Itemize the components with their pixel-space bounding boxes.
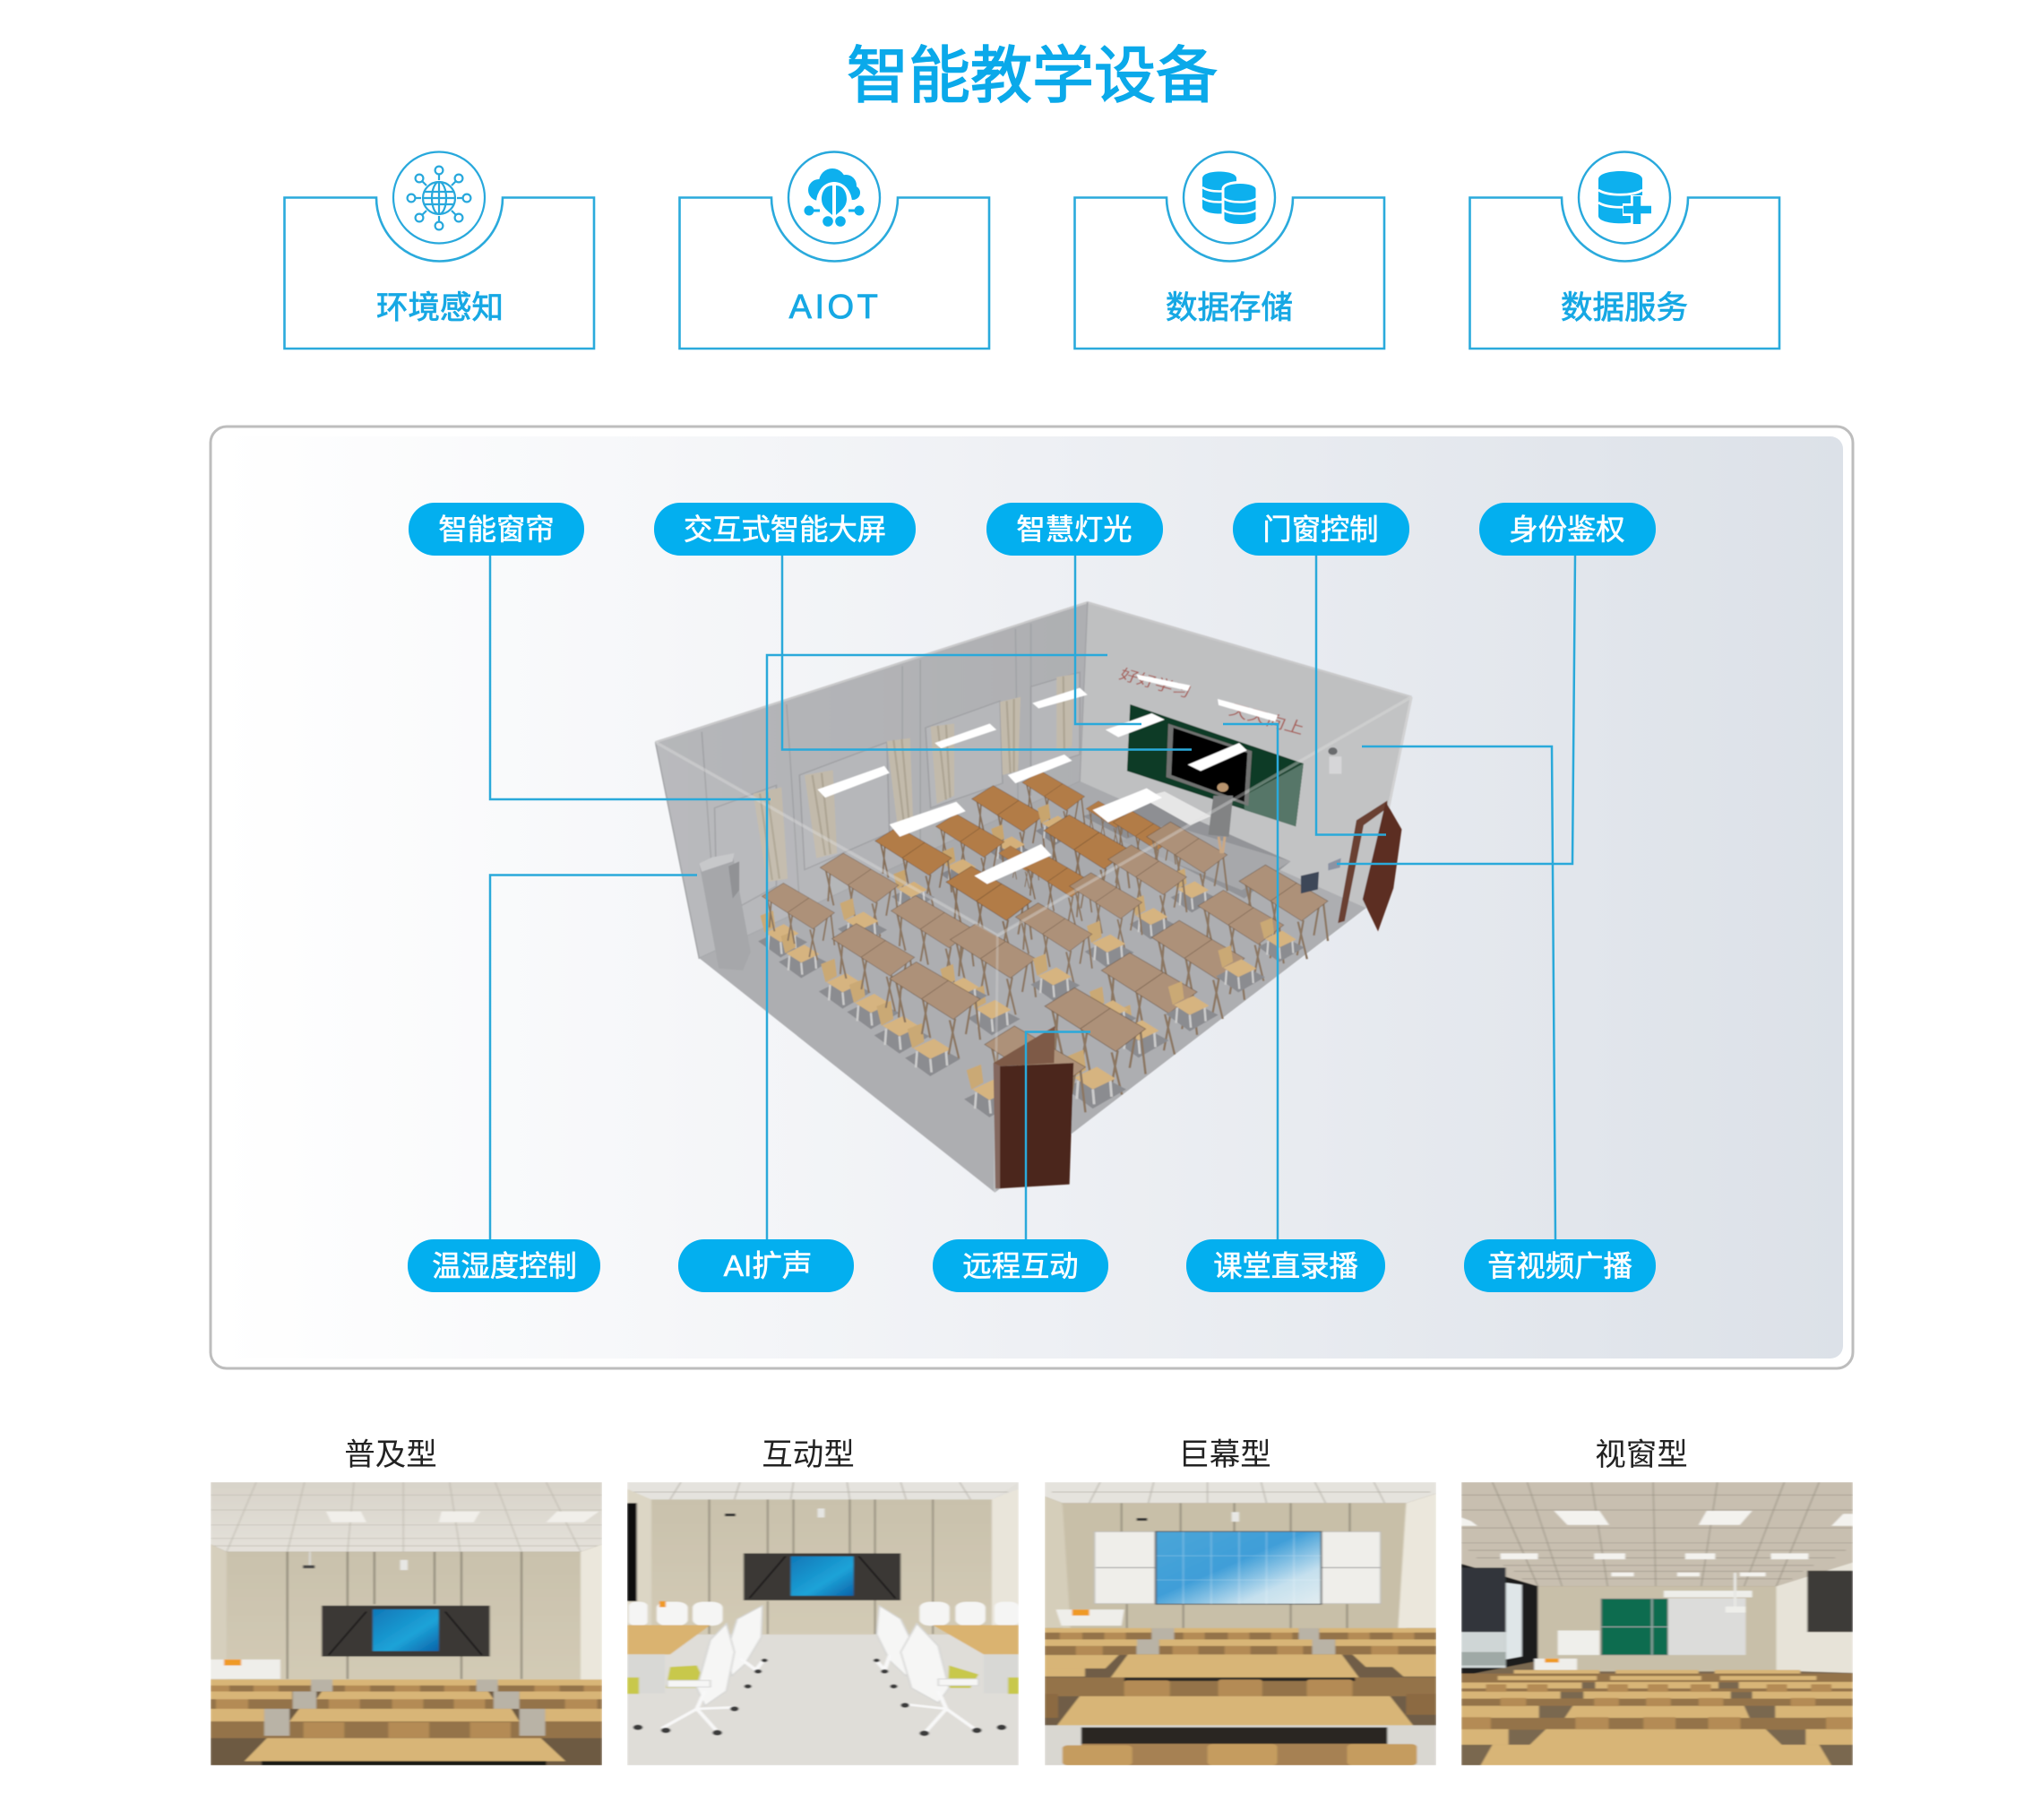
pill: 交互式智能大屏 bbox=[654, 503, 916, 556]
card label: 数据存储 bbox=[1166, 289, 1293, 325]
card: 环境感知 bbox=[285, 152, 594, 349]
icon: database plus bbox=[1598, 171, 1651, 224]
wall camera bbox=[1328, 747, 1341, 774]
pill: 课堂直录播 bbox=[1186, 1239, 1385, 1292]
pill: AI扩声: AI扩声 bbox=[724, 1250, 812, 1283]
right door bbox=[1338, 800, 1401, 931]
back wall bbox=[1080, 602, 1411, 909]
pill: 智慧灯光: 智慧灯光 bbox=[1016, 513, 1133, 546]
line: AI扩声 bbox=[767, 655, 1107, 1239]
card frame bbox=[679, 197, 989, 349]
left wall bbox=[656, 602, 1088, 958]
panel: smart classroom bbox=[211, 427, 1853, 1368]
card: 数据服务 bbox=[1469, 152, 1779, 349]
platform and podium bbox=[1082, 798, 1290, 899]
line: 智能窗帘 bbox=[490, 556, 771, 799]
line: 身份鉴权 bbox=[1337, 556, 1575, 864]
card frame bbox=[1075, 197, 1384, 349]
pill: 温湿度控制: 温湿度控制 bbox=[432, 1250, 577, 1282]
card label: 数据服务 bbox=[1561, 289, 1688, 325]
line: 门窗控制 bbox=[1316, 556, 1386, 835]
pill: 智能窗帘: 智能窗帘 bbox=[438, 513, 555, 546]
ceiling lights bbox=[817, 674, 1278, 884]
icon: database pair bbox=[1202, 172, 1257, 226]
classroom 3D illustration bbox=[656, 602, 1411, 1193]
pill: 身份鉴权 bbox=[1479, 503, 1656, 556]
curtains bbox=[754, 674, 1073, 882]
line: 音视频广播 bbox=[1362, 746, 1555, 1239]
wall windows bbox=[715, 672, 1080, 919]
floor bbox=[699, 780, 1368, 1193]
pill: 交互式智能大屏: 交互式智能大屏 bbox=[684, 513, 886, 546]
icon: globe network bbox=[393, 152, 485, 244]
line: 课堂直录播 bbox=[1223, 724, 1278, 1239]
label: 普及型: 普及型 bbox=[344, 1438, 437, 1472]
card: AIOT bbox=[679, 152, 989, 349]
pill: 智能窗帘 bbox=[409, 503, 584, 556]
line: 交互式智能大屏 bbox=[782, 556, 1192, 749]
label: 巨幕型: 巨幕型 bbox=[1178, 1438, 1271, 1472]
pill: 课堂直录播: 课堂直录播 bbox=[1213, 1250, 1358, 1282]
pill: 远程互动 bbox=[933, 1239, 1108, 1292]
front glass walls bbox=[656, 742, 997, 1193]
pill: 智慧灯光 bbox=[986, 503, 1163, 556]
panel gradient background bbox=[220, 436, 1843, 1359]
line: 智慧灯光 bbox=[1075, 556, 1141, 724]
card label: 环境感知 bbox=[376, 289, 504, 325]
wall panels bbox=[1301, 858, 1341, 893]
line: 远程互动 bbox=[1026, 1032, 1090, 1239]
card: 数据存储 bbox=[1075, 152, 1384, 349]
connector lines bbox=[490, 556, 1575, 1239]
blackboard and screen bbox=[1127, 704, 1304, 826]
label: 视窗型: 视窗型 bbox=[1595, 1438, 1688, 1472]
pill: 门窗控制: 门窗控制 bbox=[1262, 513, 1379, 546]
pill: 身份鉴权: 身份鉴权 bbox=[1509, 513, 1625, 546]
pill: 音视频广播: 音视频广播 bbox=[1487, 1250, 1632, 1282]
panel frame bbox=[211, 427, 1853, 1368]
line: 温湿度控制 bbox=[490, 875, 697, 1239]
icon: cloud brain bbox=[805, 168, 864, 227]
pill: 音视频广播 bbox=[1464, 1239, 1656, 1292]
front door bbox=[994, 1026, 1073, 1188]
classroom 3D illustration: 天天向上 bbox=[1227, 702, 1307, 738]
pill: AI扩声 bbox=[678, 1239, 854, 1292]
card label: AIOT bbox=[789, 289, 881, 326]
photo: 互动型 classroom bbox=[627, 1482, 1019, 1765]
card frame bbox=[1469, 197, 1779, 349]
air conditioner bbox=[699, 853, 751, 970]
photo: 巨幕型 classroom bbox=[1045, 1482, 1436, 1765]
photo: 视窗型 classroom bbox=[1461, 1482, 1853, 1765]
pill: 温湿度控制 bbox=[408, 1239, 600, 1292]
title: 智能教学设备 bbox=[847, 41, 1218, 110]
photo: 普及型 classroom bbox=[211, 1482, 602, 1765]
back desks bbox=[1022, 771, 1085, 837]
pill: 门窗控制 bbox=[1233, 503, 1409, 556]
pill: 远程互动: 远程互动 bbox=[962, 1250, 1079, 1282]
wall slogans: 好好学习 bbox=[1117, 666, 1193, 701]
teacher figure bbox=[1209, 783, 1233, 853]
label: 互动型: 互动型 bbox=[762, 1438, 855, 1472]
card frame bbox=[285, 197, 594, 349]
